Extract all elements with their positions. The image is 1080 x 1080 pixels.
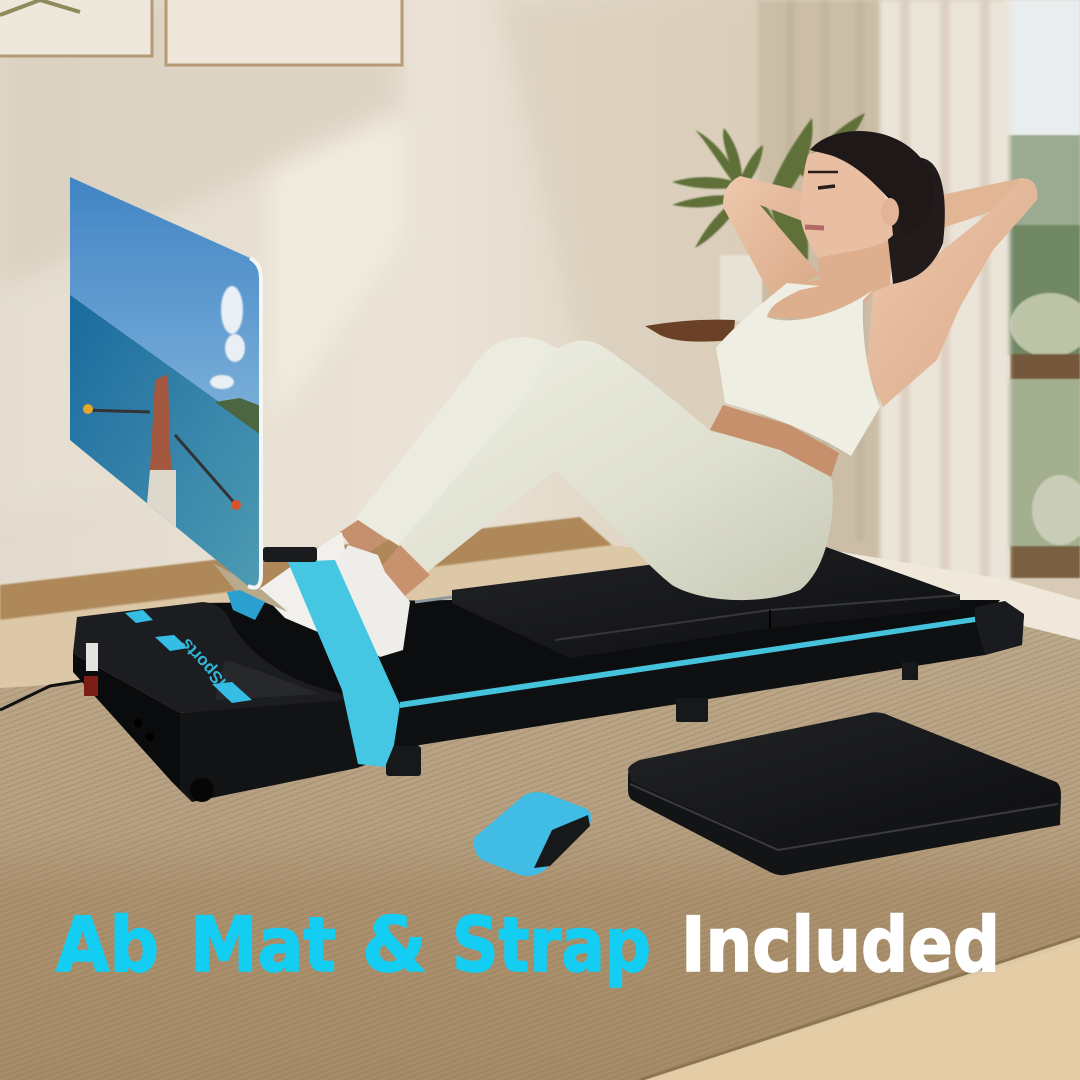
- plant: [672, 113, 865, 321]
- left arm: [723, 176, 820, 298]
- plant pot: [720, 255, 762, 321]
- floor: [0, 545, 1080, 1080]
- foot strap: [227, 547, 400, 767]
- silver strip at far edge: [415, 597, 452, 602]
- near leg and hips: [398, 341, 833, 600]
- baseboard: [0, 517, 612, 620]
- midriff: [710, 405, 839, 477]
- brand text: iSports: [177, 635, 230, 691]
- hair: [810, 131, 934, 235]
- headline: [56, 900, 1000, 989]
- wood floor bottom right: [640, 936, 1080, 1080]
- curtains: [758, 0, 1010, 590]
- treadmill rail: [357, 615, 1024, 768]
- folded mat: [628, 712, 1061, 875]
- wall: [0, 0, 1080, 640]
- warning sticker and switch: [84, 643, 98, 696]
- near shoe: [330, 545, 410, 657]
- side table: [645, 320, 735, 342]
- window: [1005, 0, 1080, 578]
- treadmill console front: [180, 698, 357, 802]
- treadmill belt: [200, 600, 1000, 706]
- treadmill console side: [73, 653, 192, 802]
- face: [800, 151, 893, 258]
- wall light and shadow: [0, 0, 760, 540]
- headline cyan words: &: [362, 900, 427, 989]
- clouds: [210, 286, 245, 389]
- right arm: [867, 178, 1037, 407]
- boat and rower: [146, 470, 176, 528]
- small blue strap: [474, 792, 591, 876]
- headline white word: Included: [681, 900, 1000, 989]
- ear: [881, 198, 899, 226]
- right forearm: [893, 178, 1022, 248]
- shoe sole: [213, 563, 288, 612]
- crop top: [716, 283, 880, 456]
- far leg: [356, 337, 580, 548]
- side controls: [134, 719, 154, 741]
- eye and brow: [808, 172, 838, 188]
- chest and neck: [767, 240, 893, 320]
- headline cyan words: [56, 900, 651, 989]
- console cyan marks: [125, 610, 252, 703]
- headline cyan words: Mat: [190, 900, 336, 989]
- carpet: [0, 625, 1080, 1080]
- treadmill feet: [386, 662, 918, 776]
- treadmill wheel: [190, 778, 214, 802]
- ponytail: [888, 157, 945, 284]
- cyan side stripe: [400, 616, 982, 708]
- headline cyan words: Ab: [56, 900, 159, 989]
- right end cap: [975, 601, 1024, 655]
- headline cyan words: Strap: [452, 900, 651, 989]
- lips: [805, 227, 824, 228]
- far shoe: [258, 532, 352, 632]
- treadmill: [73, 597, 1024, 802]
- near ankle: [377, 545, 430, 596]
- right floor highlight: [830, 550, 1080, 640]
- ab mat on deck: [452, 543, 960, 658]
- picture frames: [0, 0, 402, 65]
- far ankle: [340, 520, 388, 558]
- woman: [213, 131, 1037, 657]
- treadmill console top: [73, 602, 357, 713]
- virtual screen: [70, 177, 263, 590]
- power cord: [0, 680, 88, 710]
- island: [215, 398, 261, 435]
- console gloss: [215, 660, 320, 700]
